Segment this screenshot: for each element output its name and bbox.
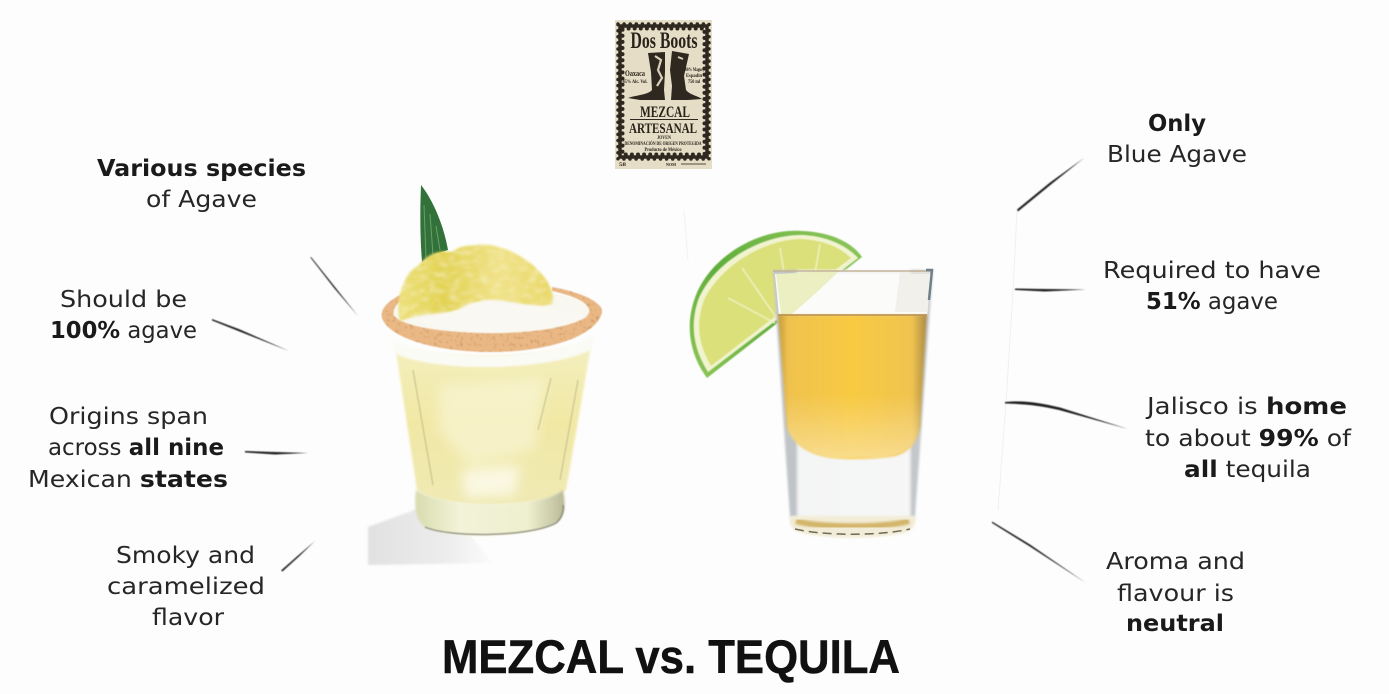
fact: blue agave: Blue Agave (1107, 140, 1247, 168)
Dos Boots mezcal label: Espadin (686, 73, 702, 79)
fact: flavor: flavor (152, 603, 224, 631)
fact: flavor (107, 541, 265, 631)
fact: agave species: Various species (97, 154, 306, 182)
connector: aroma (992, 522, 1086, 583)
Dos Boots mezcal label: NOM (666, 162, 677, 167)
Dos Boots mezcal label: 45% Alc. Vol. (622, 80, 648, 85)
hand-drawn connector lines (212, 158, 1128, 583)
lime seen through glass (776, 270, 840, 322)
glass base (790, 516, 915, 538)
Dos Boots mezcal label: JOVEN (657, 136, 671, 141)
connector: blue agave (1017, 158, 1084, 212)
connector: origins (245, 451, 308, 454)
ice highlights (438, 378, 545, 498)
whipped topping (418, 302, 588, 332)
glass rim highlights (773, 270, 933, 272)
icon: left boot (628, 52, 665, 100)
connector: 51% agave (1015, 288, 1086, 292)
fact: aroma: Aroma and (1106, 547, 1245, 575)
right column: tequila facts (1103, 109, 1352, 637)
fact: 100% agave: 100% agave (50, 316, 197, 344)
fact: 51% agave: 51% agave (1146, 287, 1278, 315)
Dos Boots mezcal label: ARTESANAL (629, 121, 697, 137)
Dos Boots mezcal label: 750 ml (688, 79, 700, 85)
pineapple slice (398, 244, 553, 321)
main title: MEZCAL vs. TEQUILA (442, 630, 900, 683)
tequila liquid (778, 315, 927, 459)
fact: blue agave: Only (1148, 109, 1206, 137)
fact: 51% agave: Required to have (1103, 256, 1321, 284)
fact: agave species: of Agave (146, 185, 257, 213)
fact: agave species (97, 154, 306, 213)
lime wedge (690, 231, 862, 378)
foam band below rim (391, 334, 595, 367)
fact: origins: across all nine (48, 433, 224, 461)
leaf garnish (420, 185, 448, 262)
fact: origins: Origins span (49, 402, 208, 430)
connector: species (310, 257, 358, 316)
margarita cocktail illustration (368, 185, 602, 565)
glass facet lines (413, 370, 578, 485)
glass base (415, 490, 565, 536)
glass upper clear zone (775, 274, 931, 316)
fact: 51% agave (1103, 256, 1321, 315)
left column: mezcal facts (28, 154, 306, 631)
connector: 100% agave (212, 319, 289, 351)
scalloped dark border (618, 24, 709, 159)
foam inside glass (392, 288, 592, 340)
Dos Boots mezcal label: Oaxaca (625, 68, 646, 78)
Dos Boots mezcal label: Dos Boots (630, 28, 698, 53)
fact: Jalisco: all tequila (1184, 455, 1311, 483)
glass shadow (368, 509, 493, 565)
shot glass (773, 270, 933, 538)
fact: Jalisco: to about 99% of (1145, 424, 1352, 452)
connector: Jalisco (1005, 401, 1128, 429)
fact: aroma (1106, 547, 1245, 637)
fact: origins (28, 402, 228, 493)
fact: Jalisco (1145, 392, 1352, 483)
fact: flavor: Smoky and (116, 541, 255, 569)
Dos Boots mezcal label: 58 (619, 163, 627, 168)
spiced salt rim (382, 287, 602, 352)
Dos Boots mezcal label: Producto de México (644, 147, 682, 153)
fact: blue agave (1107, 109, 1247, 168)
fact: 100% agave (50, 285, 197, 344)
tequila shot illustration (690, 231, 933, 538)
Dos Boots mezcal label: MEZCAL (640, 104, 690, 121)
fact: 100% agave: Should be (60, 285, 187, 313)
icon: right boot (670, 51, 702, 100)
fact: flavor: caramelized (107, 572, 265, 600)
Dos Boots mezcal label: DENOMINACIÓN DE ORIGEN PROTEGIDA (624, 139, 702, 147)
glass body with drink (395, 340, 592, 505)
fact: aroma: neutral (1126, 609, 1224, 637)
fact: aroma: flavour is (1117, 579, 1234, 607)
Dos Boots mezcal label (615, 20, 712, 169)
fact: Jalisco: Jalisco is home (1145, 392, 1347, 420)
Dos Boots mezcal label: 100% Maguey (684, 67, 705, 73)
connector: flavor (281, 541, 315, 572)
fact: origins: Mexican states (28, 465, 228, 493)
